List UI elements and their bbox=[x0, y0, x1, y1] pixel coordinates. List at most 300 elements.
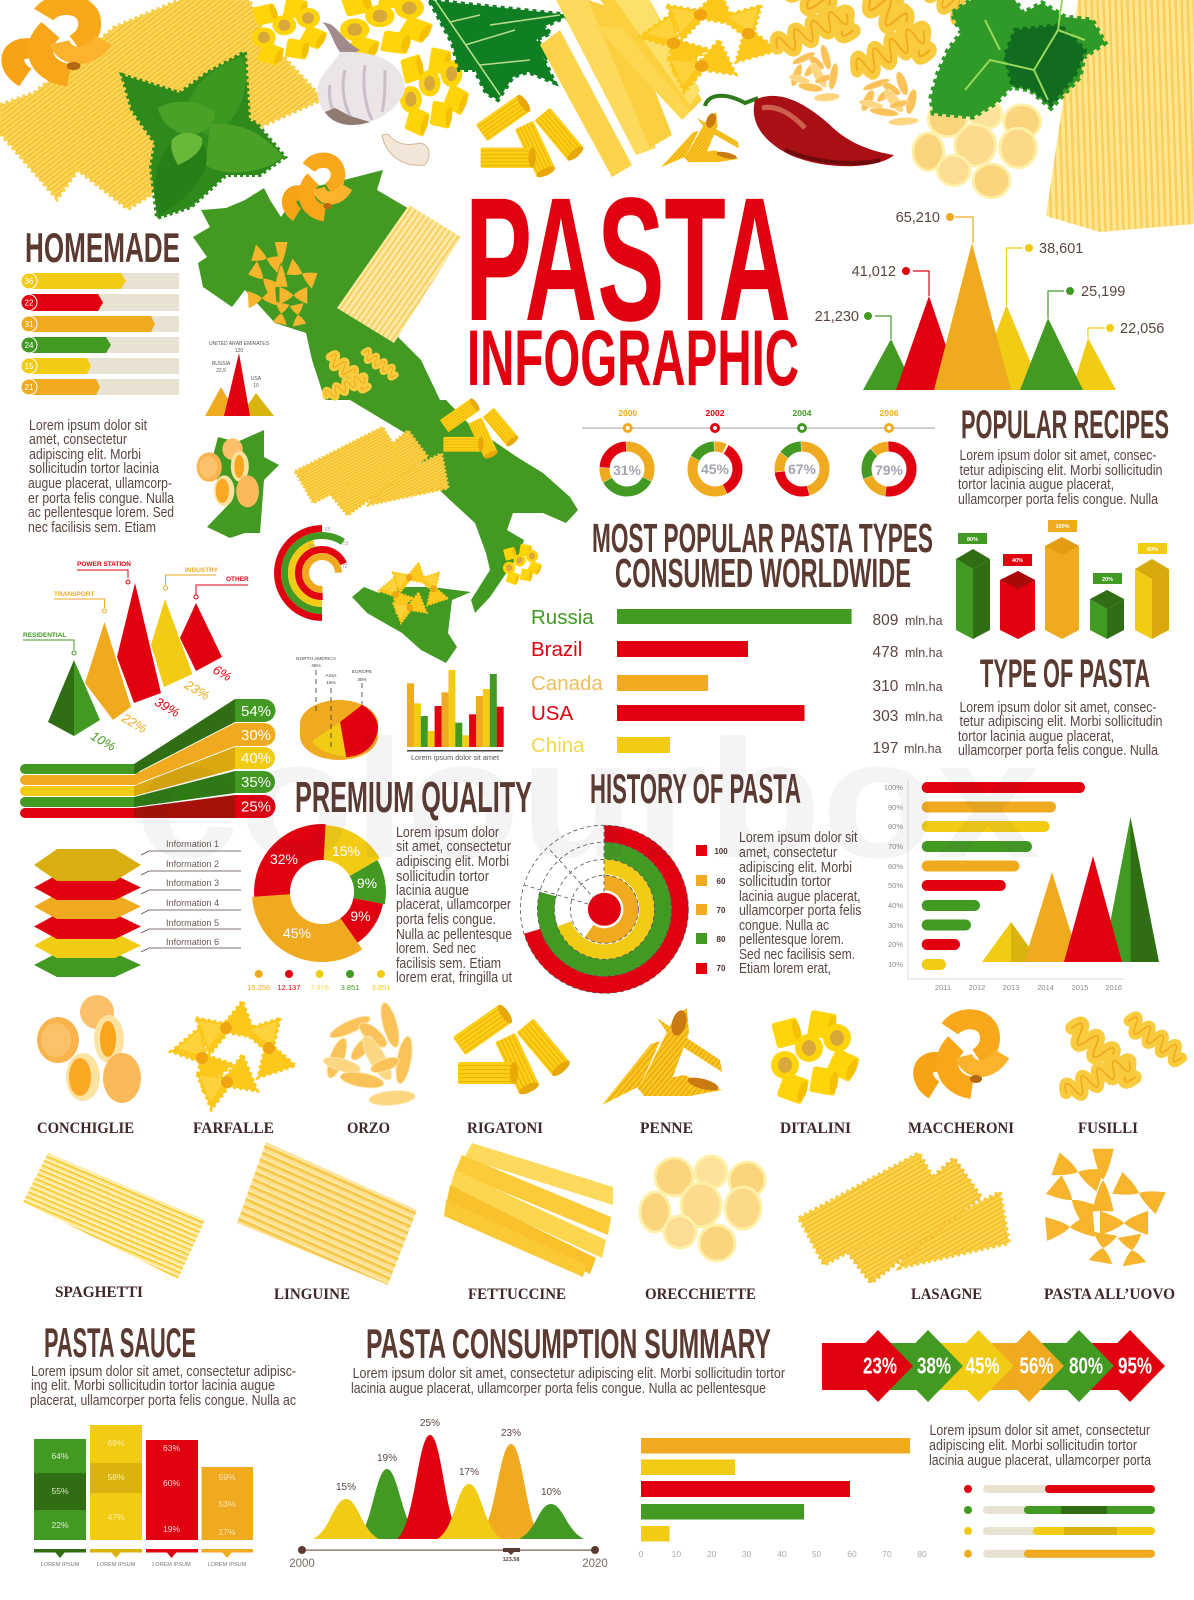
donut chart: 15% bbox=[332, 843, 360, 859]
homemade text bbox=[28, 417, 175, 536]
3D pie chart bbox=[296, 656, 378, 760]
arrow diamonds percentages: 80% bbox=[1069, 1352, 1103, 1378]
history text: adipiscing elit. Morbi bbox=[739, 859, 852, 876]
bell curve chart: 19% bbox=[377, 1453, 397, 1464]
hexagon stack: Information 2 bbox=[166, 859, 219, 870]
panel: top right peaks: 41,012 bbox=[852, 264, 896, 280]
arc chart: 51 bbox=[309, 544, 315, 550]
bars and triangles chart: 2012 bbox=[969, 983, 985, 992]
sauce text: ing elit. Morbi sollicitudin tortor lacinia augue bbox=[31, 1377, 275, 1394]
3D bar chart: type of pasta: 100% bbox=[1055, 524, 1070, 530]
pyramid chart bbox=[23, 561, 249, 754]
small peak chart: 120 bbox=[235, 348, 243, 354]
timeline donuts: 31% bbox=[613, 462, 642, 478]
history text: ullamcorper porta felis bbox=[739, 902, 862, 919]
3D pie chart: 35% bbox=[357, 677, 368, 683]
horizontal country bars: mln.ha bbox=[905, 710, 943, 724]
pasta types gallery bbox=[23, 995, 1186, 1303]
bars and triangles chart: 10% bbox=[888, 960, 903, 969]
homemade text: adipiscing elit. Morbi bbox=[29, 446, 141, 463]
panel: top right peaks: 21,230 bbox=[815, 309, 859, 325]
horizontal country bars: Brazil bbox=[531, 638, 582, 661]
stacked bars: 53% bbox=[218, 1499, 236, 1509]
pyramid chart: RESIDENTIAL bbox=[23, 632, 66, 639]
lower right text bbox=[929, 1422, 1152, 1469]
progress bars: 21 bbox=[25, 383, 34, 392]
progress bars: 24 bbox=[25, 341, 34, 350]
radial legend: 100 bbox=[714, 847, 728, 856]
lower horizontal bar chart: 60 bbox=[847, 1549, 857, 1559]
bell curve chart: 123.58 bbox=[503, 1557, 519, 1563]
premium quality text: adipiscing elit. Morbi bbox=[396, 853, 509, 870]
recipes text: tortor lacinia augue placerat, bbox=[958, 476, 1114, 493]
spaghetti on map bbox=[337, 205, 461, 343]
arrow diamonds percentages: 38% bbox=[917, 1352, 951, 1378]
pyramid chart: 10% bbox=[88, 728, 118, 754]
heading: premium quality: PREMIUM QUALITY bbox=[295, 773, 532, 822]
summary text: lacinia augue placerat, ullamcorper porta felis congue. Nulla ac pellentesque bbox=[351, 1380, 766, 1397]
bell curve chart bbox=[289, 1418, 608, 1570]
chili pepper bbox=[705, 96, 894, 166]
heading: most popular pasta types: MOST POPULAR PASTA TYPES bbox=[592, 515, 933, 561]
horizontal country bars: Russia bbox=[531, 606, 594, 629]
conchiglie on map bbox=[197, 438, 259, 507]
maccheroni: MACCHERONI bbox=[908, 1120, 1014, 1137]
ribbon stacked chart bbox=[20, 699, 276, 818]
rigatoni top bbox=[476, 93, 585, 179]
penne: PENNE bbox=[640, 1120, 693, 1137]
timeline donuts: 67% bbox=[788, 461, 817, 477]
linguine bbox=[237, 1142, 417, 1303]
pyramid chart: TRANSPORT bbox=[54, 591, 94, 598]
bars and triangles chart: 90% bbox=[888, 803, 903, 812]
sauce text bbox=[30, 1363, 296, 1409]
hexagon stack: Information 6 bbox=[166, 937, 219, 948]
stacked bars: 19% bbox=[163, 1524, 180, 1534]
pill progress bars bbox=[964, 1485, 1155, 1558]
stacked bars: 63% bbox=[163, 1443, 180, 1453]
penne bbox=[602, 1008, 722, 1137]
title bbox=[465, 162, 799, 402]
arugula bbox=[429, 0, 570, 100]
bars and triangles chart: 2014 bbox=[1037, 983, 1054, 992]
conchiglie: CONCHIGLIE bbox=[37, 1120, 134, 1137]
donut chart: 7.976 bbox=[310, 983, 329, 992]
progress bars: 15 bbox=[25, 362, 34, 371]
bars and triangles chart: 70% bbox=[888, 842, 903, 851]
stacked bars: LOREM IPSUM bbox=[41, 1562, 80, 1568]
small peak chart: UNITED ARAB EMIRATES bbox=[209, 341, 270, 347]
panel: top right peaks bbox=[815, 210, 1164, 390]
3D bar chart: type of pasta: 40% bbox=[1012, 558, 1023, 564]
summary text: Lorem ipsum dolor sit amet, consectetur adipiscing elit. Morbi sollicitudin tortor bbox=[353, 1365, 785, 1382]
pyramid chart: OTHER bbox=[226, 576, 249, 583]
homemade text: sollicitudin tortor lacinia bbox=[29, 460, 160, 477]
ditalini top bbox=[252, 0, 470, 137]
lower right text: lacinia augue placerat, ullamcorper porta bbox=[929, 1452, 1152, 1469]
progress bars bbox=[21, 273, 179, 395]
heading: pasta sauce: PASTA SAUCE bbox=[44, 1319, 196, 1366]
pyramid chart: POWER STATION bbox=[77, 561, 131, 568]
horizontal country bars: 303 bbox=[872, 708, 898, 725]
radial legend: 60 bbox=[717, 877, 726, 886]
progress bars: 36 bbox=[25, 277, 34, 286]
horizontal country bars: 809 bbox=[872, 612, 898, 629]
premium quality text: placerat, ullamcorper bbox=[396, 896, 511, 913]
pyramid chart: 23% bbox=[181, 677, 212, 703]
maccheroni bbox=[908, 1019, 1014, 1137]
farfalle on map bbox=[378, 562, 448, 623]
radial chart bbox=[520, 825, 688, 993]
premium quality text: lacinia augue bbox=[396, 882, 469, 899]
lower horizontal bar chart: 10 bbox=[672, 1549, 681, 1559]
stacked bars: 17% bbox=[218, 1527, 236, 1537]
homemade text: ac pellentesque lorem. Sed bbox=[28, 504, 174, 521]
arrow diamonds percentages: 95% bbox=[1118, 1352, 1152, 1378]
panel: homemade bbox=[21, 224, 180, 536]
timeline donuts: 2004 bbox=[793, 408, 812, 418]
lasagne: LASAGNE bbox=[911, 1286, 982, 1303]
premium quality text: sit amet, consectetur bbox=[396, 838, 511, 855]
title: INFOGRAPHIC bbox=[467, 313, 799, 402]
horizontal country bars: Canada bbox=[531, 672, 603, 695]
macaroni on map bbox=[289, 160, 347, 215]
small peak chart bbox=[205, 341, 274, 416]
arrow diamonds percentages: 45% bbox=[966, 1352, 1000, 1378]
premium quality text: porta felis congue. bbox=[396, 911, 496, 928]
recipes text bbox=[958, 447, 1162, 508]
title: PASTA bbox=[465, 162, 791, 358]
history text: sollicitudin tortor bbox=[739, 873, 831, 890]
map of Italy bbox=[193, 160, 578, 663]
bars and triangles chart: 2016 bbox=[1105, 983, 1122, 992]
bell curve chart: 17% bbox=[459, 1467, 479, 1478]
heading: most popular pasta types bbox=[592, 515, 933, 596]
fusilli bbox=[1062, 1015, 1186, 1137]
pasta all uovo on map bbox=[248, 242, 318, 327]
history text: congue. Nulla ac bbox=[739, 917, 829, 934]
small bar chart bbox=[407, 670, 504, 762]
bars and triangles chart: 20% bbox=[888, 940, 903, 949]
homemade text: er porta felis congue. Nulla bbox=[28, 490, 175, 507]
donut chart: 45% bbox=[283, 925, 311, 941]
3D pie chart: EUROPE bbox=[352, 669, 372, 675]
homemade text: augue placerat, ullamcorp- bbox=[28, 475, 172, 492]
lasagne sheets top bbox=[0, 0, 321, 209]
donut chart: 3.851 bbox=[341, 983, 359, 992]
horizontal country bars: 310 bbox=[872, 678, 899, 695]
3D bar chart: type of pasta bbox=[956, 520, 1169, 639]
ditalini on map bbox=[503, 544, 543, 585]
garlic bbox=[317, 22, 405, 125]
spaghetti bbox=[23, 1153, 205, 1301]
panel: pasta consumption summary bbox=[289, 1320, 785, 1570]
history text: lacinia augue placerat, bbox=[739, 888, 860, 905]
fusilli: FUSILLI bbox=[1078, 1120, 1138, 1137]
hexagon stack: Information 1 bbox=[166, 839, 219, 850]
stacked bars: 58% bbox=[107, 1472, 125, 1482]
stacked bars: 55% bbox=[51, 1486, 69, 1496]
panel: top right peaks: 22,056 bbox=[1120, 321, 1164, 337]
rigatoni: RIGATONI bbox=[467, 1120, 543, 1137]
premium quality text: facilisis sem. Etiam bbox=[396, 955, 501, 972]
3D pie chart: 15% bbox=[326, 680, 337, 686]
linguine: LINGUINE bbox=[274, 1286, 350, 1303]
bars and triangles chart: 2013 bbox=[1003, 983, 1019, 992]
fettuccine top bbox=[540, 0, 702, 177]
small peak chart: 22,5 bbox=[216, 368, 226, 374]
timeline donuts: 2006 bbox=[880, 408, 899, 418]
timeline donuts bbox=[582, 408, 935, 492]
horizontal country bars: mln.ha bbox=[905, 680, 943, 694]
panel: popular recipes bbox=[958, 403, 1169, 508]
premium quality text: sollicitudin tortor bbox=[396, 868, 489, 885]
stacked bars: 60% bbox=[163, 1478, 180, 1488]
bars and triangles chart: 2015 bbox=[1072, 983, 1088, 992]
hexagon stack: Information 5 bbox=[166, 918, 219, 929]
horizontal country bars: mln.ha bbox=[904, 742, 942, 756]
hexagon stack: Information 3 bbox=[166, 878, 219, 889]
hexagon stack bbox=[34, 839, 241, 977]
farfalle: FARFALLE bbox=[193, 1120, 274, 1137]
bars and triangles chart: 40% bbox=[888, 901, 903, 910]
pyramid chart: INDUSTRY bbox=[185, 567, 219, 574]
lower right text: Lorem ipsum dolor sit amet, consectetur bbox=[930, 1422, 1150, 1439]
history text: amet, consectetur bbox=[739, 844, 837, 861]
lower horizontal bar chart: 40 bbox=[777, 1549, 787, 1559]
lower horizontal bar chart: 20 bbox=[707, 1549, 717, 1559]
sauce text: placerat, ullamcorper porta felis congue. Nulla ac bbox=[30, 1392, 296, 1409]
donut 2006 bbox=[866, 446, 912, 492]
arrow diamonds percentages bbox=[822, 1330, 1165, 1402]
progress bars: 22 bbox=[25, 298, 34, 308]
bars and triangles chart: 2011 bbox=[935, 983, 951, 992]
ribbon stacked chart: 30% bbox=[241, 727, 271, 744]
top food illustrations bbox=[0, 0, 1194, 232]
premium quality text bbox=[396, 824, 513, 986]
radial legend bbox=[696, 845, 728, 974]
donut 2000 bbox=[604, 446, 650, 492]
horizontal country bars: 478 bbox=[872, 644, 898, 661]
type of pasta text bbox=[958, 699, 1162, 759]
farfalle top bbox=[638, 0, 779, 93]
3D pie chart: NORTH AMERICA bbox=[296, 656, 337, 662]
hexagon stack: Information 4 bbox=[166, 898, 219, 909]
donut chart: 15.356 bbox=[247, 983, 270, 992]
stacked bars: 47% bbox=[107, 1512, 125, 1522]
small peak chart: RUSSIA bbox=[212, 361, 231, 367]
arrow diamonds percentages: 56% bbox=[1020, 1352, 1054, 1378]
stacked bars: LOREM IPSUM bbox=[97, 1562, 136, 1568]
farfalle bbox=[171, 1001, 296, 1137]
arc chart: 65 bbox=[325, 527, 331, 533]
lasagne bbox=[799, 1153, 1009, 1303]
small peak chart: 10 bbox=[253, 383, 259, 389]
panel: top right peaks: 38,601 bbox=[1039, 241, 1083, 257]
fettuccine: FETTUCCINE bbox=[468, 1286, 566, 1303]
pasta all uovo bbox=[1044, 1149, 1175, 1303]
arrow diamonds percentages: 23% bbox=[863, 1352, 897, 1378]
summary text bbox=[351, 1365, 785, 1397]
rigatoni on map bbox=[440, 397, 520, 460]
stacked bars bbox=[34, 1425, 253, 1568]
premium quality text: lorem erat, fringilla ut bbox=[396, 969, 513, 986]
orecchiette: ORECCHIETTE bbox=[645, 1286, 756, 1303]
spaghetti top bbox=[1046, 0, 1194, 232]
horizontal country bars: 197 bbox=[872, 740, 898, 757]
premium quality text: lorem. Sed nec bbox=[396, 940, 476, 957]
watermark: colourbox bbox=[135, 705, 1040, 893]
ditalini: DITALINI bbox=[780, 1120, 851, 1137]
pasta all uovo: PASTA ALL’UOVO bbox=[1044, 1286, 1175, 1303]
history text: pellentesque lorem. bbox=[739, 931, 844, 948]
3D bar chart: type of pasta: 20% bbox=[1102, 577, 1113, 583]
arc chart: 53 bbox=[343, 541, 349, 547]
radial legend: 80 bbox=[717, 935, 726, 944]
sardinia bbox=[207, 430, 279, 538]
bars and triangles chart: 50% bbox=[888, 881, 903, 890]
homemade text: Lorem ipsum dolor sit bbox=[29, 417, 148, 434]
panel: top right peaks: 25,199 bbox=[1081, 284, 1125, 300]
lasagne on map bbox=[295, 427, 448, 515]
timeline donuts: 2002 bbox=[706, 408, 725, 418]
history text bbox=[739, 829, 862, 977]
bell curve chart: 10% bbox=[541, 1487, 561, 1498]
horizontal country bars: China bbox=[531, 734, 585, 757]
ribbon stacked chart: 25% bbox=[241, 798, 271, 816]
timeline donuts: 79% bbox=[875, 462, 904, 478]
sauce text: Lorem ipsum dolor sit amet, consectetur adipisc- bbox=[31, 1363, 296, 1380]
ribbon stacked chart: 40% bbox=[241, 750, 271, 767]
macaroni top bbox=[13, 5, 103, 77]
bars and triangles chart: 30% bbox=[888, 921, 903, 930]
3D bar chart: type of pasta: 60% bbox=[1147, 547, 1158, 553]
donut chart: 12.137 bbox=[278, 983, 300, 992]
lower horizontal bar chart: 80 bbox=[917, 1549, 927, 1559]
fusilli on map bbox=[324, 349, 398, 400]
bars and triangles chart: 100% bbox=[884, 783, 903, 792]
stacked bars: 22% bbox=[51, 1520, 69, 1530]
sicily bbox=[352, 587, 471, 663]
timeline donuts: 45% bbox=[701, 461, 730, 477]
donut chart: 9% bbox=[357, 875, 377, 891]
donut chart bbox=[247, 824, 390, 992]
small peak chart: USA bbox=[251, 376, 262, 382]
horizontal country bars: mln.ha bbox=[905, 614, 943, 628]
type of pasta text: tortor lacinia augue placerat, bbox=[958, 728, 1114, 745]
donut 2004 bbox=[780, 446, 824, 492]
stacked bars: 64% bbox=[51, 1451, 69, 1461]
panel: type of pasta bbox=[958, 652, 1162, 759]
panel: premium quality bbox=[34, 773, 532, 992]
heading: most popular pasta types: CONSUMED WORLDWIDE bbox=[615, 550, 911, 596]
stacked bars: LOREM IPSUM bbox=[208, 1562, 247, 1568]
arc chart: 72 bbox=[342, 564, 348, 570]
bell curve chart: 2020 bbox=[582, 1558, 608, 1570]
heading: pasta consumption summary: PASTA CONSUMPTION SUMMARY bbox=[366, 1320, 771, 1367]
panel: pasta sauce bbox=[30, 1319, 296, 1568]
panel: history of pasta bbox=[520, 765, 862, 993]
small bar chart: Lorem ipsum dolor sit amet bbox=[411, 753, 500, 762]
heading: history of pasta: HISTORY OF PASTA bbox=[590, 765, 801, 812]
orecchiette bbox=[640, 1156, 765, 1303]
heading: homemade: HOMEMADE bbox=[25, 224, 180, 271]
garlic clove bbox=[382, 134, 429, 165]
rigatoni bbox=[453, 1003, 572, 1137]
3D bar chart: type of pasta: 80% bbox=[967, 537, 978, 543]
history text: Sed nec facilisis sem. bbox=[739, 946, 855, 963]
ditalini bbox=[771, 1010, 861, 1137]
premium quality text: Nulla ac pellentesque bbox=[396, 926, 512, 943]
lower right text: adipiscing elit. Morbi sollicitudin tortor bbox=[929, 1437, 1137, 1454]
stacked bars: 59% bbox=[218, 1472, 236, 1482]
radial legend: 70 bbox=[717, 964, 726, 973]
pyramid chart: 22% bbox=[118, 710, 149, 736]
history text: Lorem ipsum dolor sit bbox=[739, 829, 858, 846]
ribbon stacked chart: 35% bbox=[241, 774, 271, 791]
orecchiette top bbox=[913, 99, 1040, 198]
horizontal country bars bbox=[531, 606, 943, 757]
donut chart: 9% bbox=[350, 908, 371, 924]
bell curve chart: 15% bbox=[336, 1482, 356, 1493]
donut chart: 32% bbox=[270, 851, 298, 867]
stacked bars: LOREM IPSUM bbox=[152, 1562, 191, 1568]
arc chart bbox=[278, 527, 366, 618]
3D pie chart: ASIA bbox=[326, 673, 337, 679]
basil bbox=[122, 52, 285, 218]
orzo: ORZO bbox=[347, 1120, 390, 1137]
lower horizontal bar chart bbox=[639, 1438, 927, 1559]
history text: Etiam lorem erat, bbox=[739, 960, 831, 977]
penne top bbox=[661, 112, 739, 167]
orzo bbox=[322, 1001, 416, 1137]
bars and triangles chart: 60% bbox=[888, 862, 903, 871]
stacked bars: 69% bbox=[107, 1438, 125, 1448]
timeline donuts: 2000 bbox=[618, 408, 637, 418]
spaghetti: SPAGHETTI bbox=[55, 1284, 143, 1301]
orzo top bbox=[788, 44, 919, 126]
donut 2002 bbox=[692, 446, 738, 492]
pyramid chart: 6% bbox=[210, 662, 234, 684]
fusilli top bbox=[773, 0, 983, 79]
horizontal country bars: USA bbox=[531, 702, 573, 725]
3D pie chart: 45% bbox=[311, 663, 322, 669]
premium quality text: Lorem ipsum dolor bbox=[396, 824, 499, 841]
bell curve chart: 23% bbox=[501, 1428, 521, 1439]
mainland bbox=[193, 170, 578, 613]
homemade text: amet, consectetur bbox=[29, 431, 127, 448]
donut chart: 3.851 bbox=[372, 983, 390, 992]
lower horizontal bar chart: 30 bbox=[742, 1549, 752, 1559]
bell curve chart: 2000 bbox=[289, 1558, 315, 1570]
horizontal country bars: mln.ha bbox=[905, 646, 943, 660]
panel: top right peaks: 65,210 bbox=[896, 210, 940, 226]
progress bars: 31 bbox=[25, 320, 34, 329]
lower horizontal bar chart: 0 bbox=[639, 1549, 644, 1559]
lower horizontal bar chart: 50 bbox=[812, 1549, 822, 1559]
homemade text: nec facilisis sem. Etiam bbox=[28, 519, 156, 536]
bars and triangles chart bbox=[884, 780, 1159, 992]
pyramid chart: 39% bbox=[152, 694, 182, 720]
ribbon stacked chart: 54% bbox=[241, 703, 271, 720]
lower horizontal bar chart: 70 bbox=[882, 1549, 892, 1559]
radial legend: 70 bbox=[717, 906, 726, 915]
parsley bbox=[931, 0, 1105, 117]
conchiglie bbox=[37, 995, 141, 1137]
fettuccine bbox=[444, 1143, 613, 1303]
bell curve chart: 25% bbox=[420, 1418, 440, 1429]
bars and triangles chart: 80% bbox=[888, 822, 903, 831]
